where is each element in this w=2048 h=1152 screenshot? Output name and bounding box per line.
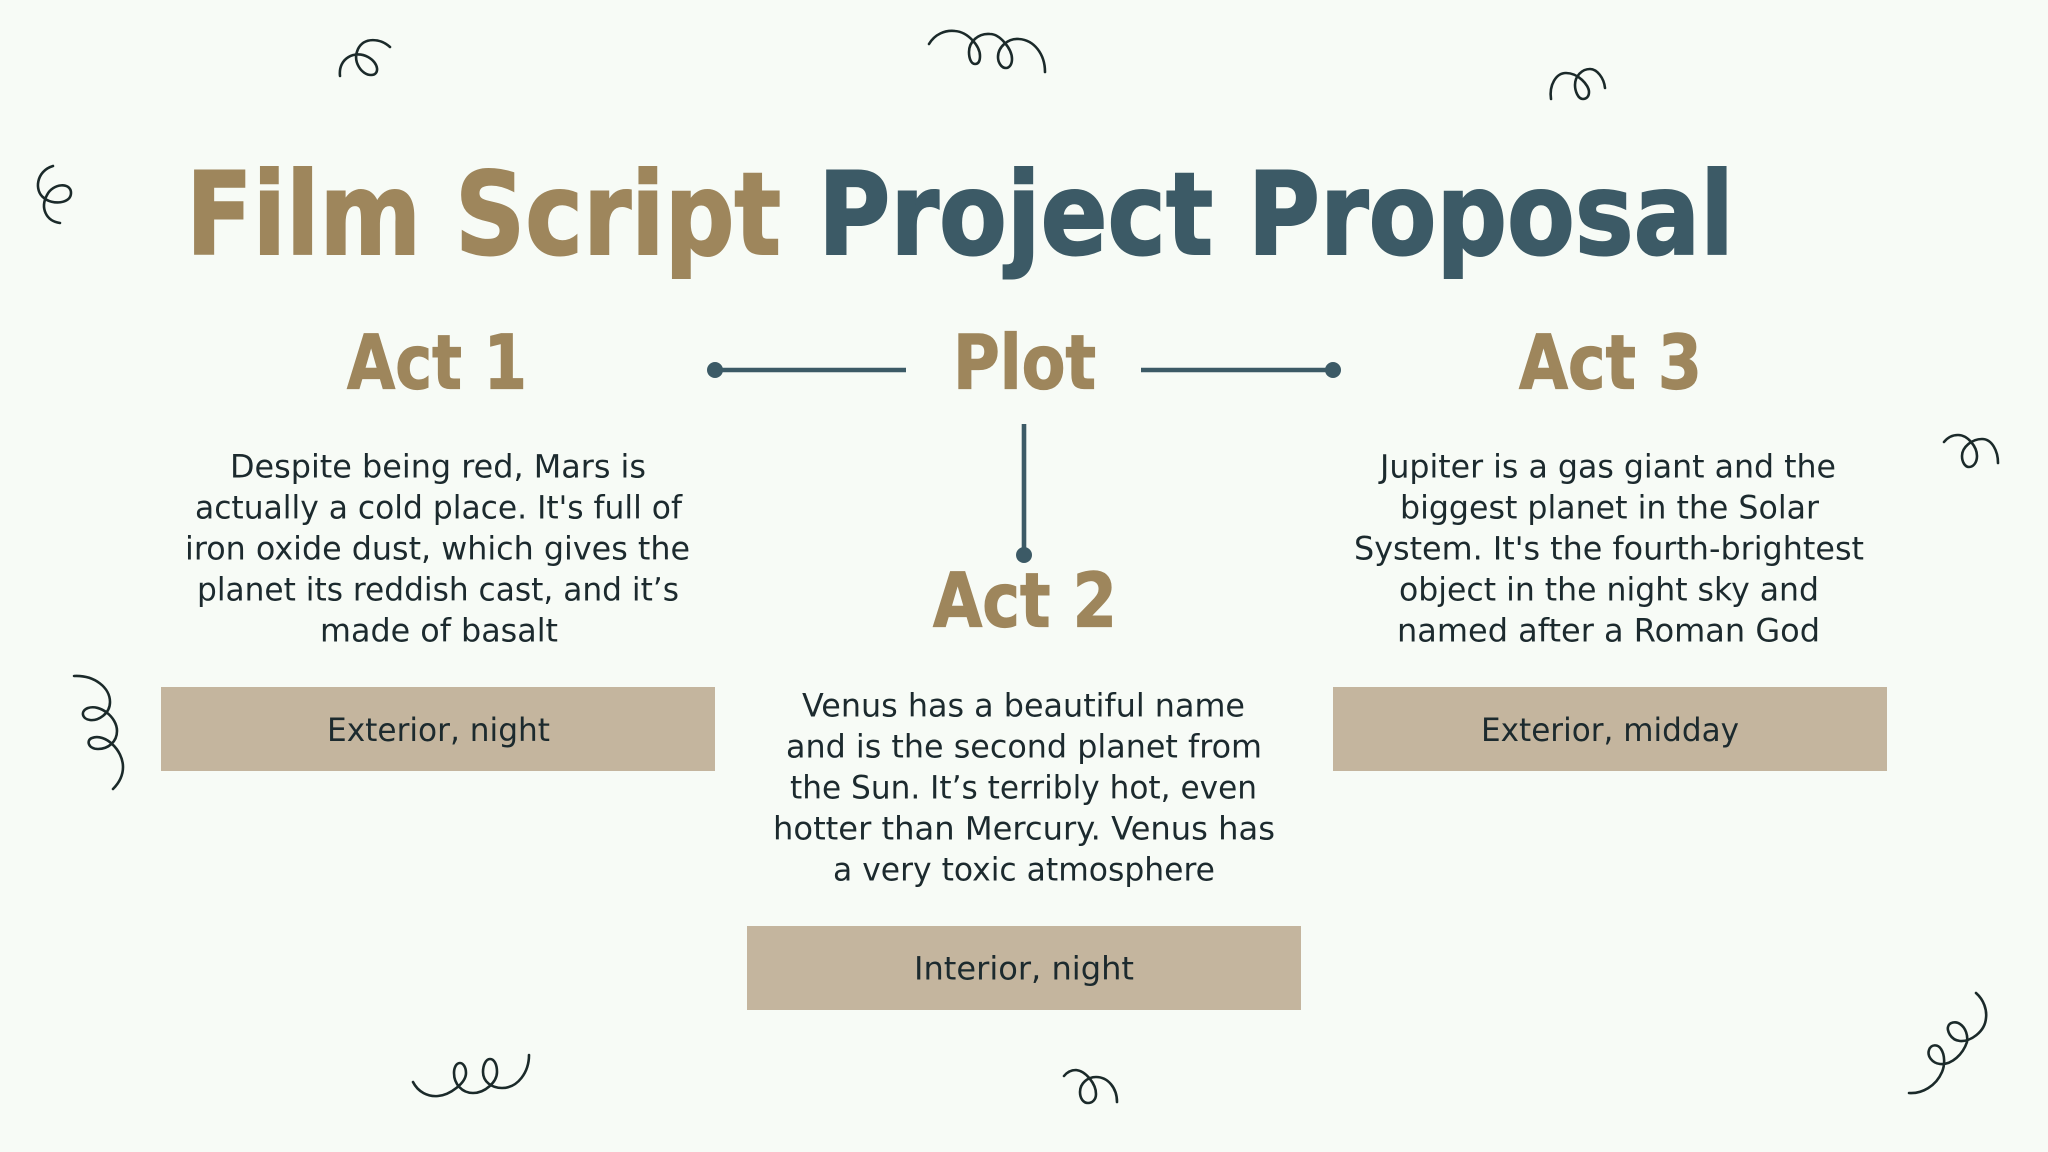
- connector: Plot to Act 3: [1141, 362, 1341, 378]
- label box: Interior, night: Interior, night: [914, 950, 1134, 988]
- heading: Act 1: Act 1: [347, 318, 527, 406]
- text block: Act 3 description: System. It's the fourth-brightest: [1354, 530, 1864, 568]
- panel: Act 3: [1333, 318, 1887, 771]
- connector: Plot to Act 1: [707, 362, 906, 378]
- text block: Act 3 description: [1354, 448, 1864, 650]
- text block: Act 2 description: and is the second planet from: [786, 728, 1262, 766]
- text block: Act 3 description: named after a Roman God: [1397, 612, 1820, 650]
- text block: Act 2 description: hotter than Mercury. Venus has: [773, 810, 1275, 848]
- icon: squiggle bottom right: [1909, 993, 1986, 1093]
- text block: Act 2 description: [773, 686, 1275, 888]
- icon: squiggle right: [1944, 435, 1998, 467]
- title: gold part: Film Script: [186, 148, 781, 281]
- label box: Exterior, night: [161, 687, 715, 771]
- text block: Act 2 description: a very toxic atmosphere: [833, 850, 1215, 888]
- label box: Interior, night: [747, 926, 1301, 1010]
- text block: Act 1 description: iron oxide dust, which gives the: [185, 530, 690, 568]
- heading: Act 2: Act 2: [933, 556, 1117, 644]
- icon: squiggle top center: [929, 31, 1045, 72]
- icon: squiggle bottom center: [1064, 1070, 1117, 1103]
- label box: Exterior, midday: [1333, 687, 1887, 771]
- connector: Plot to Act 2: [1016, 424, 1032, 563]
- text block: Act 1 description: actually a cold place. It's full of: [195, 488, 683, 526]
- text block: Act 2 description: Venus has a beautiful name: [802, 686, 1245, 724]
- title: [186, 148, 1734, 281]
- text block: Act 2 description: the Sun. It’s terribly hot, even: [790, 768, 1257, 806]
- text block: Act 3 description: object in the night sky and: [1399, 570, 1819, 608]
- heading: Plot: Plot: [953, 318, 1096, 406]
- icon: squiggle bottom left: [413, 1055, 529, 1096]
- label box: Exterior, midday: Exterior, midday: [1481, 711, 1739, 749]
- icon: squiggle top left: [340, 40, 390, 76]
- label box: Exterior, night: Exterior, night: [327, 711, 550, 749]
- title: teal part: Project Proposal: [818, 148, 1734, 281]
- panel: Act 1: [161, 318, 715, 771]
- text block: Act 1 description: [185, 448, 690, 650]
- heading: Act 3: Act 3: [1519, 318, 1702, 406]
- icon: squiggle left lower: [74, 676, 123, 789]
- text block: Act 1 description: Despite being red, Mars is: [230, 448, 646, 486]
- text block: Act 1 description: planet its reddish cast, and it’s: [197, 570, 679, 608]
- text block: Act 1 description: made of basalt: [320, 612, 558, 650]
- text block: Act 3 description: biggest planet in the Solar: [1400, 488, 1820, 526]
- icon: squiggle left upper: [38, 166, 71, 223]
- text block: Act 3 description: Jupiter is a gas giant and the: [1378, 448, 1836, 486]
- panel: Act 2: [747, 556, 1301, 1010]
- icon: squiggle top right: [1551, 69, 1605, 99]
